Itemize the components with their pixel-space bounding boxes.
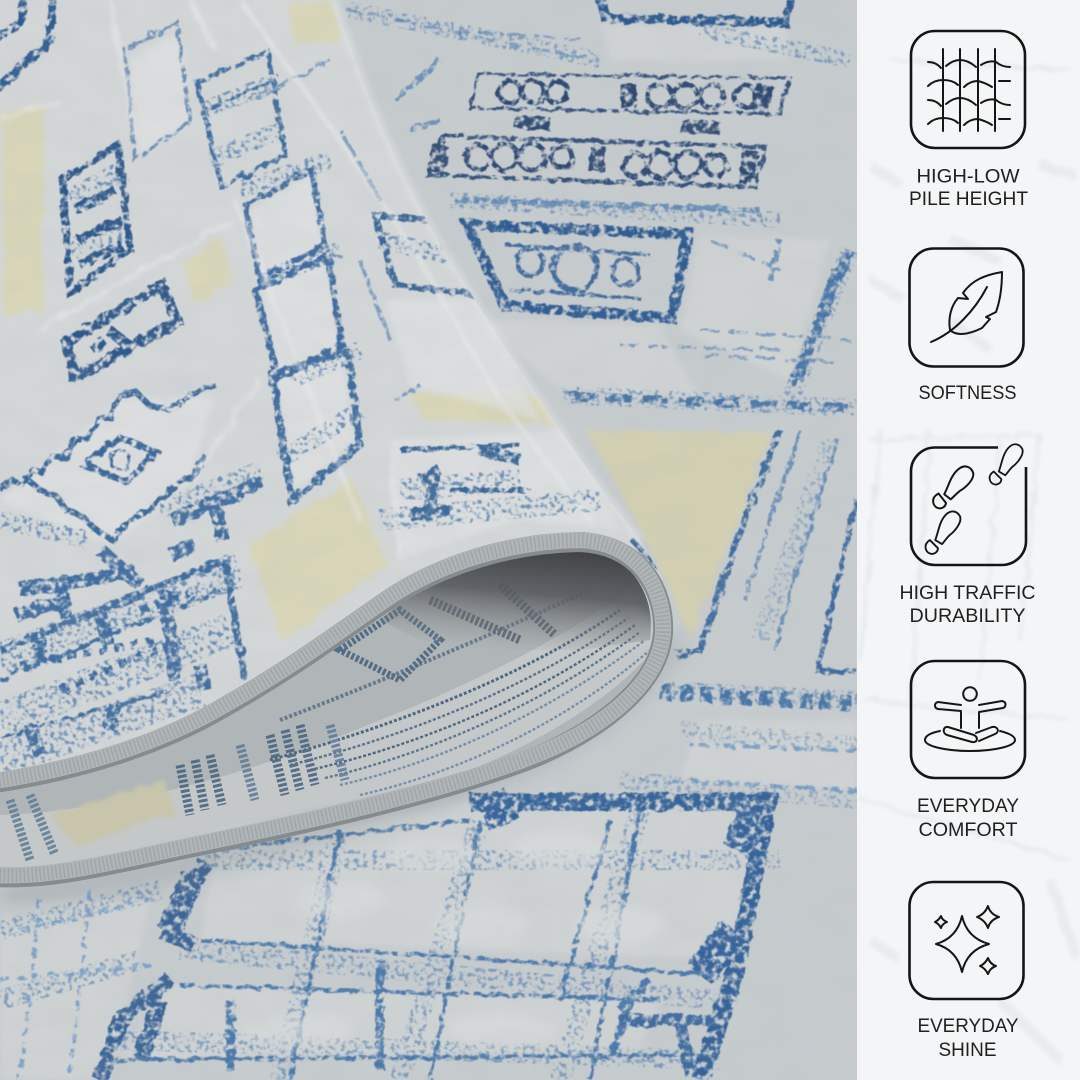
motif: upper tile row [470,74,790,128]
label: everyday comfort: COMFORT [918,820,1018,841]
roll underside [0,552,652,862]
floor pale grid blocks [0,25,857,1080]
motif: left dark panel [63,145,130,292]
roll pale ridge lines [0,0,590,560]
motif: lower decorative border [0,560,245,755]
label: everyday shine: EVERYDAY [918,1016,1019,1037]
hem band [0,540,663,875]
motif: left blue wedges [165,862,205,945]
label: high-low pile height: PILE HEIGHT [909,189,1028,210]
floor pale cushions [245,830,665,1046]
feature: high traffic durability [900,441,1036,627]
roll fold shading edge [335,0,640,540]
motif: blue H shapes [15,482,262,618]
icon: pile height [911,31,1025,148]
motif: right blue border lines [790,250,850,385]
motif: framed flower rectangle [468,225,688,318]
motif: right edge specks [250,60,660,570]
label: high-low pile height [909,166,1028,210]
motif: top blue panel [600,0,792,22]
label: high traffic durability [900,583,1036,627]
faint rug ghost pattern [860,60,1078,1060]
label: everyday comfort [917,796,1019,841]
underside tan patch [50,780,175,845]
underside woven pattern [10,585,650,860]
floor speckle bands [0,10,857,1080]
hem shadow [0,542,663,877]
icon: sparkles [910,882,1024,999]
motif: dark top left corner [0,0,52,90]
rug fibre mottling [0,0,857,1080]
underside light lower band [0,620,652,868]
motif: large blue corner frame [470,802,768,1080]
motif: grid lines [0,810,720,1080]
roll pale panels [0,30,620,560]
underside base colour [0,601,652,815]
feature: softness [910,248,1024,404]
panel background [857,0,1080,1080]
cast shadow of rolled rug [0,640,672,900]
underside dark cavity [380,545,651,650]
roll blue pattern [0,0,660,755]
right feature panel [857,0,1080,1080]
label: everyday comfort: EVERYDAY [917,796,1019,817]
hem ribbing [0,540,663,875]
rolled rug hem binding [0,540,663,877]
label: everyday shine: SHINE [938,1040,996,1061]
label: high-low pile height: HIGH-LOW [916,166,1020,188]
feature: high-low pile height [909,31,1028,210]
motif: panel columns [125,22,480,500]
floor tan triangle [585,430,772,640]
label: softness: SOFTNESS [918,383,1016,404]
label: everyday shine [918,1016,1019,1061]
feature: everyday shine [910,882,1024,1061]
feature: everyday comfort [911,661,1025,841]
roll base colour [0,0,680,790]
icon: footprints [911,441,1028,565]
label: high traffic durability: DURABILITY [910,606,1026,627]
motif: stepped medallion [0,385,215,540]
motif: lower tile row [428,136,765,187]
tan panels on roll [2,0,565,640]
motif: corner block [490,795,755,975]
roll speckle bands [0,80,600,760]
floor pattern: lower rug panel [0,795,768,1080]
rug floor base [0,0,860,1080]
icon: feather [910,248,1024,366]
icon: meditating figure [911,661,1025,778]
motif: diamond row panel [66,285,177,377]
floor pattern: upper right rug motifs [340,0,857,790]
label: high traffic durability: HIGH TRAFFIC [900,583,1036,604]
rolled rug top surface [0,0,680,790]
